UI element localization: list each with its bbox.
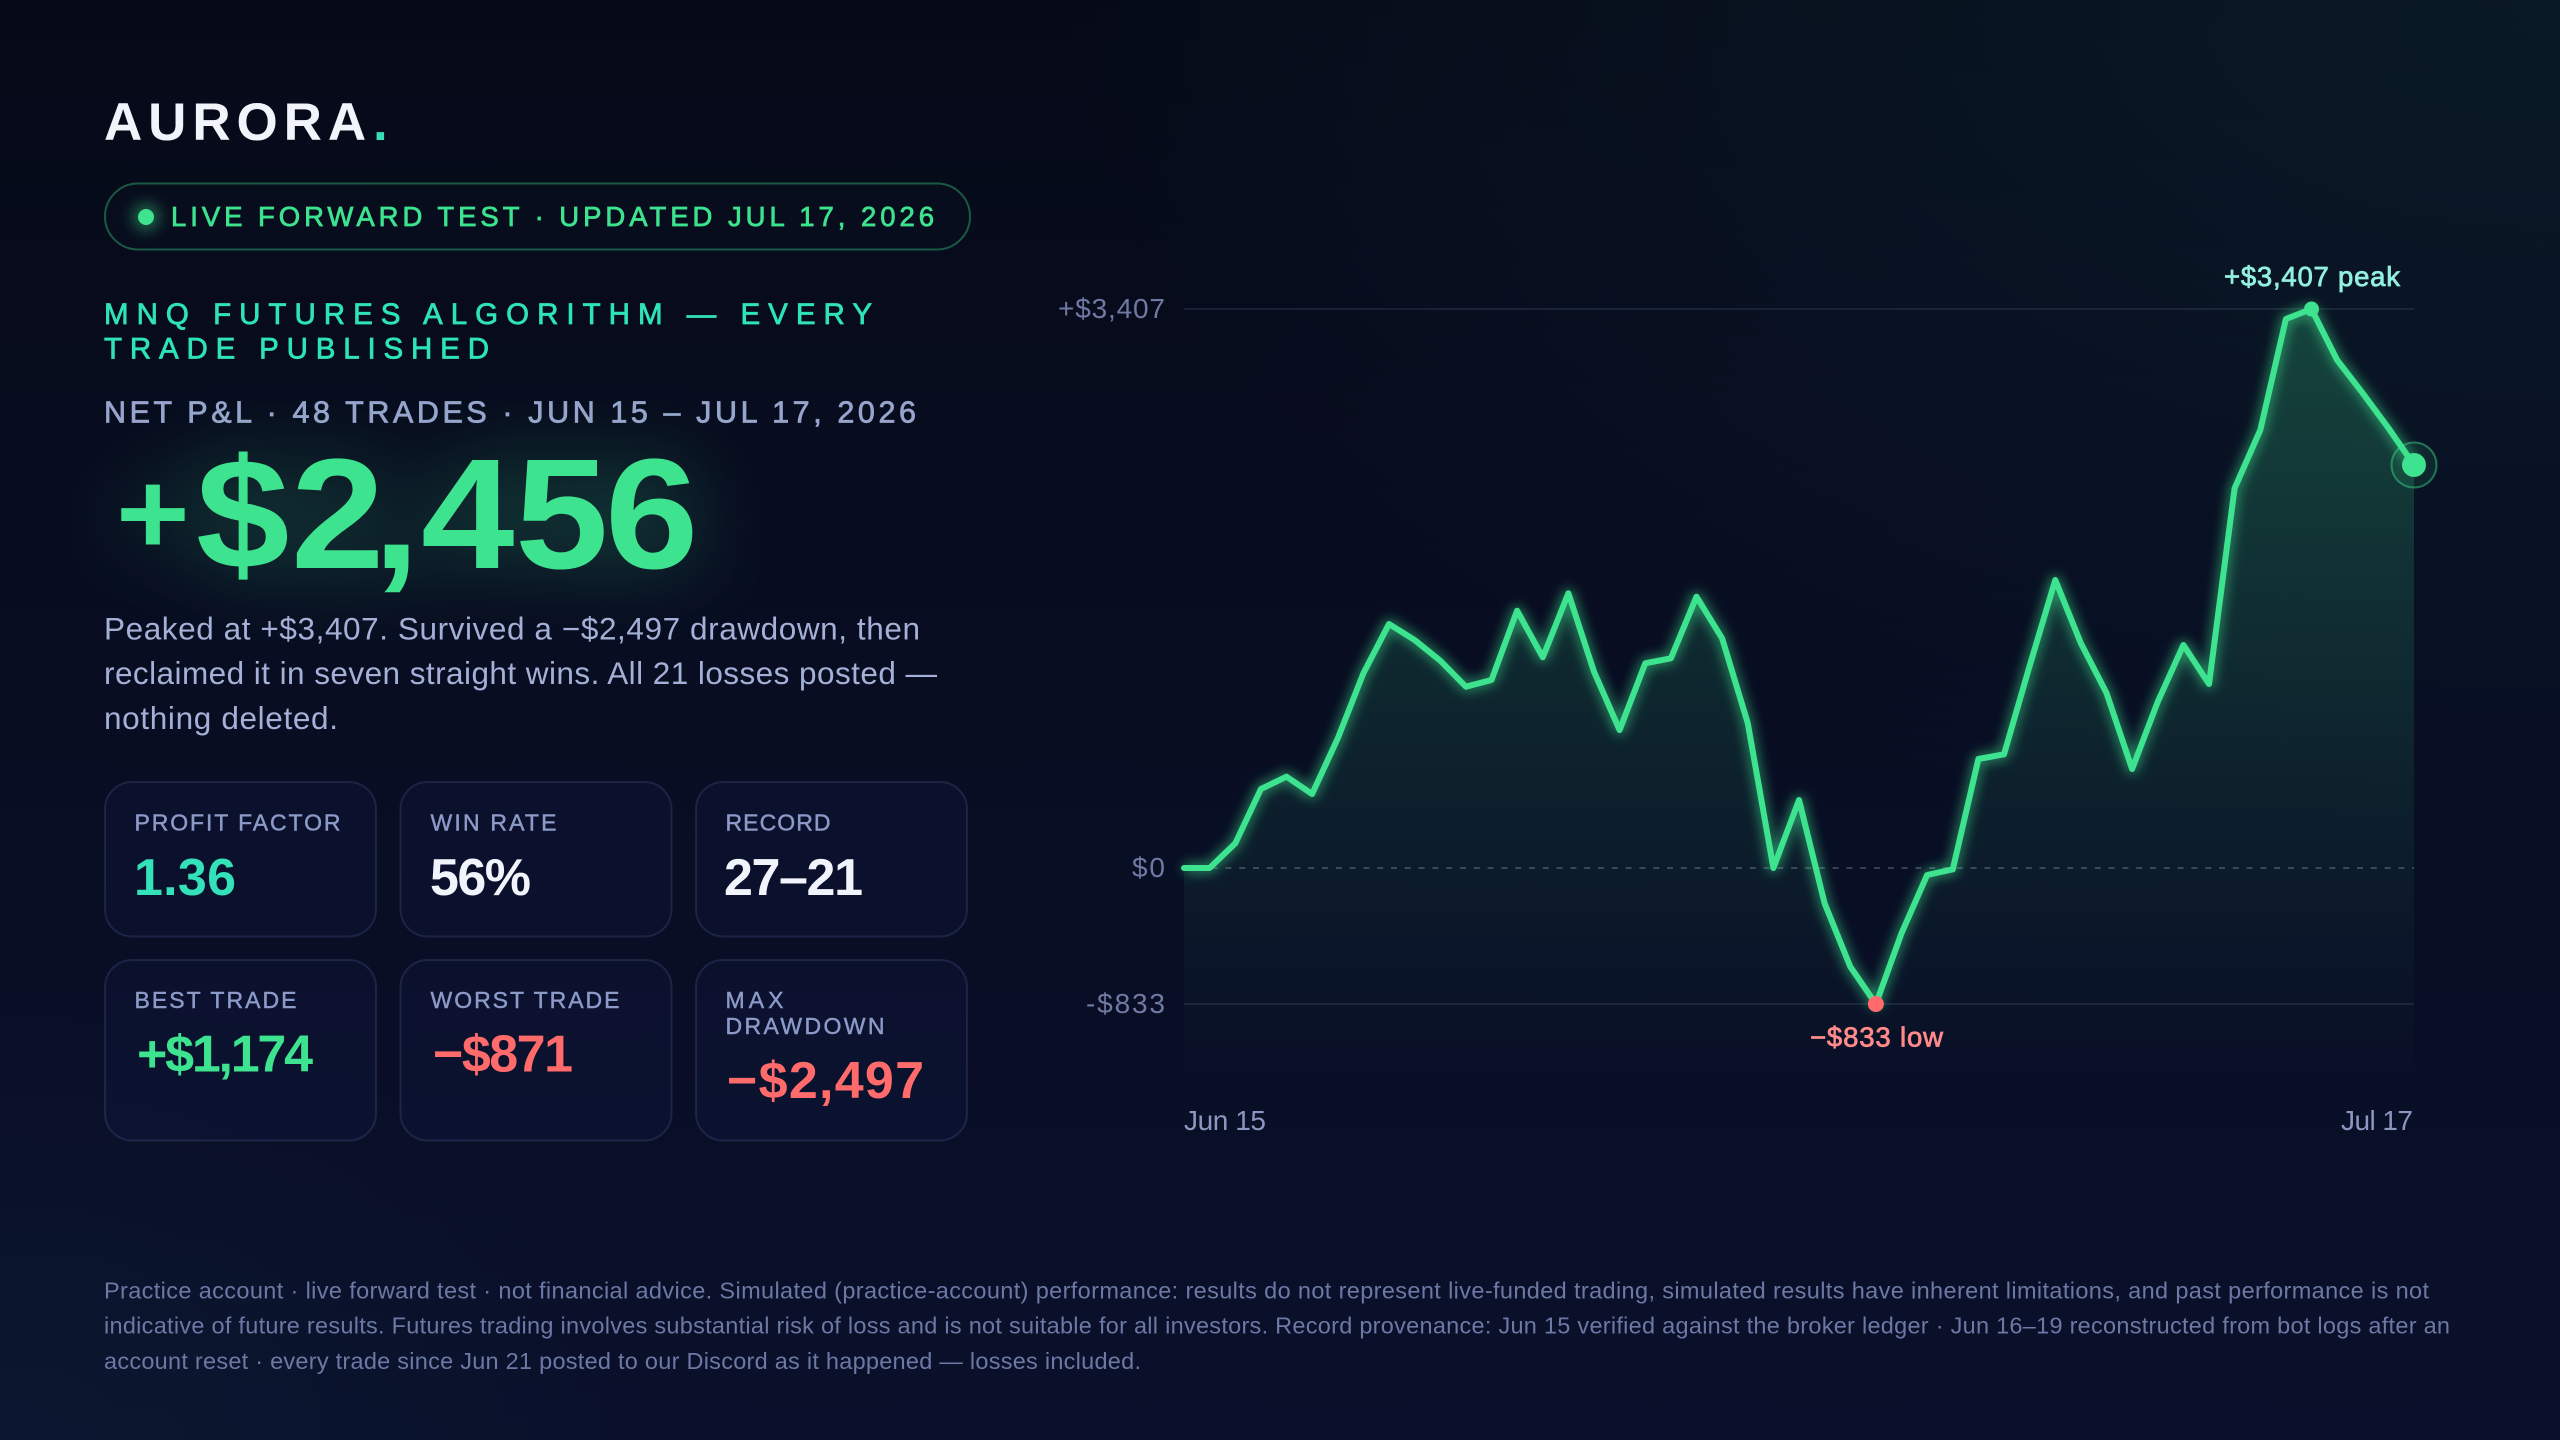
- card: max drawdown: −$2,497: [727, 1052, 924, 1110]
- curve glow: [1184, 309, 2414, 1004]
- summary paragraph: Peaked at +$3,407. Survived a −$2,497 drawdown, then: [104, 610, 920, 646]
- area fill under curve: [1184, 309, 2414, 1080]
- headline figure: net profit: $2,456: [196, 427, 698, 602]
- card: record: 27–21: [724, 849, 863, 907]
- pill text: LIVE FORWARD TEST · UPDATED JUL 17, 2026: [171, 201, 934, 232]
- x-axis labels: [1184, 1105, 2413, 1136]
- stat cards: [105, 782, 967, 1140]
- y-axis labels: $0: [1132, 852, 1165, 883]
- peak marker and label: [2224, 261, 2400, 316]
- peak marker and label: +$3,407 peak: [2224, 261, 2400, 292]
- card: max drawdown: [696, 960, 967, 1140]
- card: win rate: 56%: [430, 849, 531, 907]
- card: worst trade: [400, 960, 672, 1140]
- brand logo: AURORA.: AURORA: [104, 93, 372, 152]
- net P&L label: NET P&L · 48 TRADES · JUN 15 – JUL 17, 2026: [104, 396, 916, 430]
- card: best trade: [105, 960, 376, 1140]
- card: best trade: BEST TRADE: [134, 987, 296, 1013]
- card: profit factor: PROFIT FACTOR: [134, 810, 340, 836]
- summary paragraph: nothing deleted.: [104, 700, 338, 736]
- low marker and label: −$833 low: [1810, 1022, 1943, 1053]
- subtitle: MNQ FUTURES ALGORITHM — EVERY: [104, 298, 872, 331]
- disclaimer footnote: [104, 1277, 2450, 1374]
- low marker and label: [1810, 996, 1943, 1053]
- headline figure: net profit: +: [116, 447, 190, 579]
- equity curve line: [1184, 309, 2414, 1004]
- card: max drawdown: DRAWDOWN: [726, 1013, 884, 1039]
- headline figure: net profit: $2,456: [196, 427, 698, 602]
- subtitle: [104, 298, 872, 366]
- card: best trade: +$1,174: [137, 1026, 313, 1084]
- card: record: [696, 782, 967, 936]
- disclaimer footnote: indicative of future results. Futures trading involves substantial risk of loss and is not suitable for all investors. Record provenance: Jun 15 verified against the broker ledger · Jun 16–19 reconstructed from bot logs after an: [104, 1312, 2450, 1338]
- summary paragraph: [104, 610, 938, 736]
- x-axis labels: Jun 15: [1184, 1105, 1266, 1136]
- brand logo: AURORA.: .: [373, 93, 394, 152]
- card: win rate: WIN RATE: [430, 810, 556, 836]
- disclaimer footnote: Practice account · live forward test · not financial advice. Simulated (practice-account) performance: results do not represent live-funded trading, simulated results have inherent limitations, and past performance is not: [104, 1277, 2429, 1303]
- card: win rate: [400, 782, 672, 936]
- disclaimer footnote: account reset · every trade since Jun 21 posted to our Discord as it happened — losses included.: [104, 1348, 1141, 1374]
- y-axis labels: [1058, 293, 1165, 1019]
- card: profit factor: 1.36: [134, 849, 236, 907]
- summary paragraph: reclaimed it in seven straight wins. All 21 losses posted —: [104, 655, 938, 691]
- card: worst trade: −$871: [433, 1026, 573, 1084]
- card: record: RECORD: [726, 810, 830, 836]
- subtitle: TRADE PUBLISHED: [104, 333, 489, 366]
- headline figure: net profit: +: [116, 447, 190, 579]
- card: max drawdown: MAX: [726, 987, 784, 1013]
- icon: live status dot: [132, 203, 160, 231]
- status pill: [105, 184, 970, 250]
- card: worst trade: WORST TRADE: [430, 987, 620, 1013]
- card: profit factor: [105, 782, 376, 936]
- y-axis labels: -$833: [1086, 988, 1165, 1019]
- y-axis labels: +$3,407: [1058, 293, 1165, 324]
- end-of-curve marker: [2392, 442, 2436, 488]
- x-axis labels: Jul 17: [2341, 1105, 2413, 1136]
- equity curve chart: [1058, 261, 2436, 1136]
